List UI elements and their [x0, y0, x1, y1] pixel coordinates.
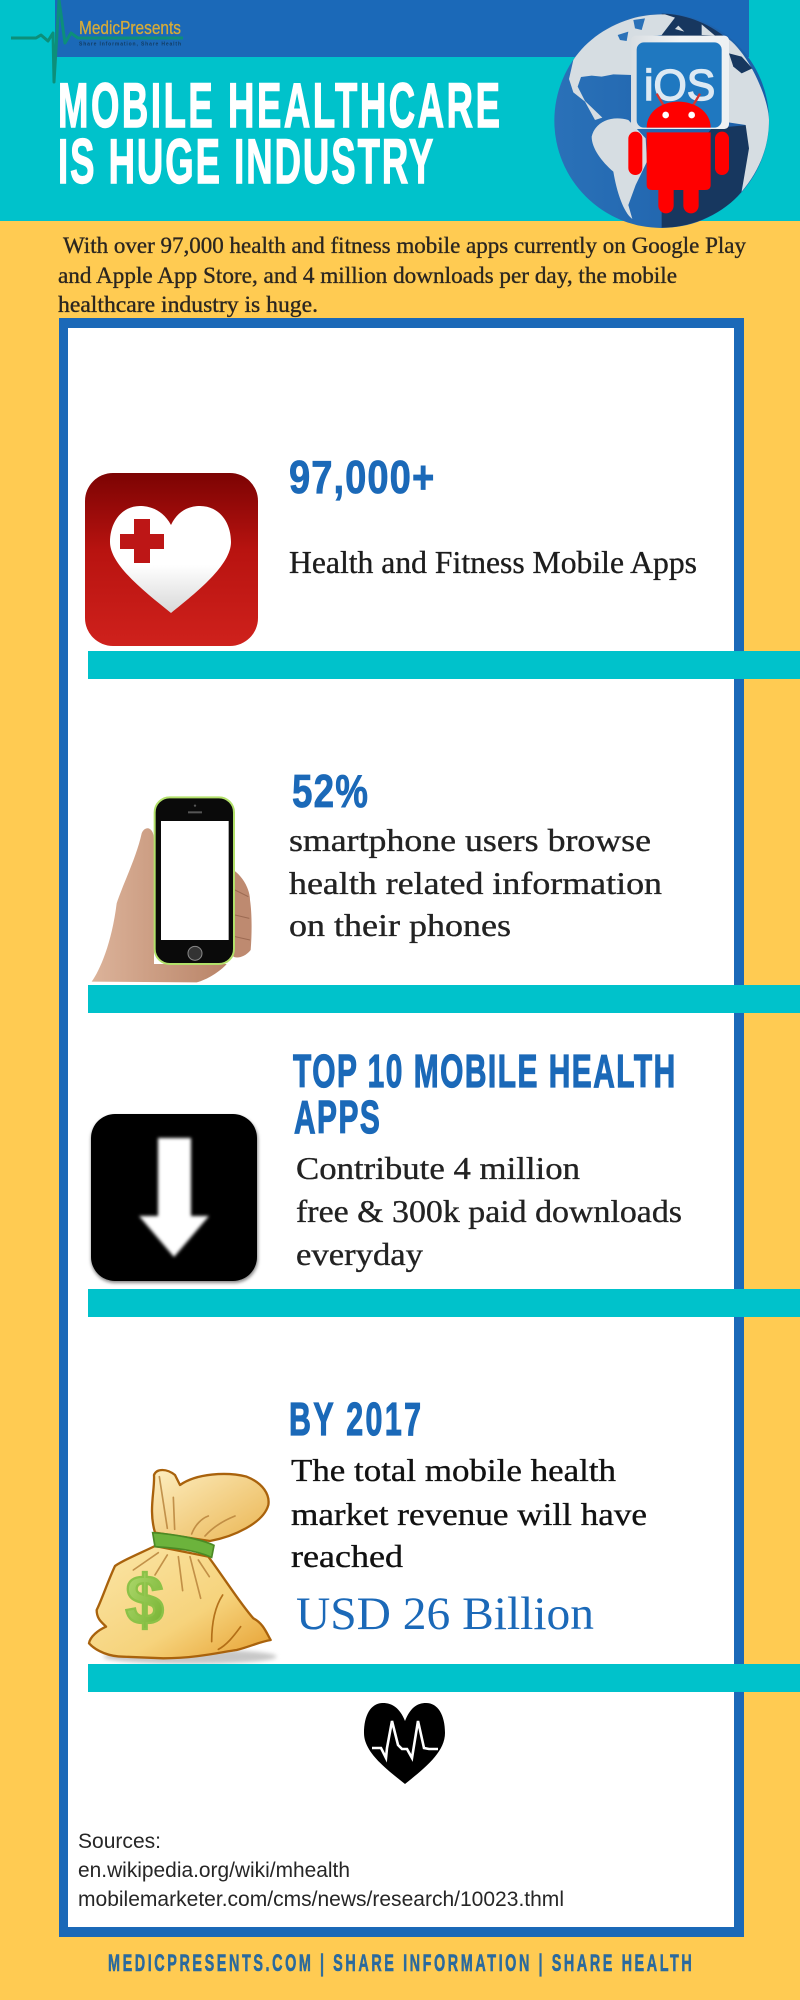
sources: [78, 1830, 564, 1911]
text: smartphone users: on their phones: [289, 907, 511, 943]
land masses: [569, 14, 769, 219]
heading: top 10 mobile health apps: TOP 10 MOBILE HEALTH: [293, 1047, 675, 1098]
Android robot: [628, 94, 729, 213]
intro paragraph: and Apple App Store, and 4 million downloads per day, the mobile: [58, 263, 677, 288]
Europe islands: [729, 53, 752, 73]
sources: mobilemarketer.com/cms/news/research/10023.thml: [78, 1888, 564, 1911]
text: market revenue: The total mobile health: [291, 1452, 616, 1488]
intro paragraph: [58, 233, 746, 317]
divider bar 4: [88, 1664, 800, 1692]
sources: Sources:: [78, 1830, 161, 1853]
iOS badge: iOS: [644, 61, 715, 110]
sources: en.wikipedia.org/wiki/mhealth: [78, 1859, 350, 1882]
title: IS HUGE INDUSTRY: [58, 126, 433, 196]
icon: red app tile with heart and cross: [85, 473, 258, 646]
text: market revenue: [291, 1452, 647, 1574]
heading: top 10 mobile health apps: APPS: [294, 1093, 380, 1144]
stat 4: by 2017: [89, 1395, 647, 1664]
text: market revenue: reached: [291, 1538, 403, 1574]
heading: top 10 mobile health apps: [293, 1047, 675, 1144]
iOS badge: [631, 36, 729, 129]
text: market revenue: market revenue will have: [291, 1496, 647, 1532]
figure: USD 26 Billion: USD 26 Billion: [296, 1588, 594, 1640]
text: smartphone users: smartphone users browse: [289, 822, 651, 858]
stat 1: 97,000+: [85, 452, 697, 646]
divider bar 3: [88, 1289, 800, 1317]
icon: globe with iOS badge and Android robot: [554, 13, 769, 228]
heading: by 2017: BY 2017: [289, 1395, 421, 1446]
stat 2: 52%: [92, 765, 662, 982]
text: smartphone users: health related information: [289, 865, 662, 901]
logo: MedicPresents: [11, 0, 183, 82]
heading: 52%: 52%: [292, 765, 368, 817]
icon: money bag: $: [125, 1561, 164, 1639]
logo: MedicPresents: MedicPresents: [79, 17, 181, 38]
intro paragraph: With over 97,000 health and fitness mobile apps currently on Google Play: [63, 233, 746, 258]
title: [58, 70, 500, 196]
title: MOBILE HEALTHCARE: [58, 70, 500, 140]
dark ocean sides: [662, 14, 751, 228]
divider bar 2: [88, 985, 800, 1013]
Greenland sea patches: [618, 18, 645, 41]
icon: hand holding phone: [92, 797, 252, 982]
footer tagline: MEDICPRESENTS.COM | SHARE INFORMATION | SHARE HEALTH: [108, 1950, 692, 1977]
intro paragraph: healthcare industry is huge.: [58, 292, 318, 317]
heading: 97,000+: 97,000+: [289, 452, 434, 503]
icon: black download tile: [91, 1114, 258, 1283]
text: downloads: free & 300k paid downloads: [296, 1193, 682, 1229]
text: downloads: Contribute 4 million: [296, 1150, 580, 1186]
divider bar 1: [88, 651, 800, 679]
header band: [0, 0, 800, 221]
icon: black heart with pulse: [364, 1703, 445, 1784]
text: smartphone users: [289, 822, 662, 943]
text: health and fitness apps: Health and Fitness Mobile Apps: [289, 544, 697, 580]
logo: MedicPresents: Share Information, Share Health: [79, 42, 181, 48]
text: downloads: [296, 1150, 682, 1272]
panel frame: [59, 318, 744, 1937]
icon: money bag: [89, 1470, 277, 1664]
text: downloads: everyday: [296, 1236, 423, 1272]
stat 3: top 10 apps: [91, 1047, 682, 1283]
